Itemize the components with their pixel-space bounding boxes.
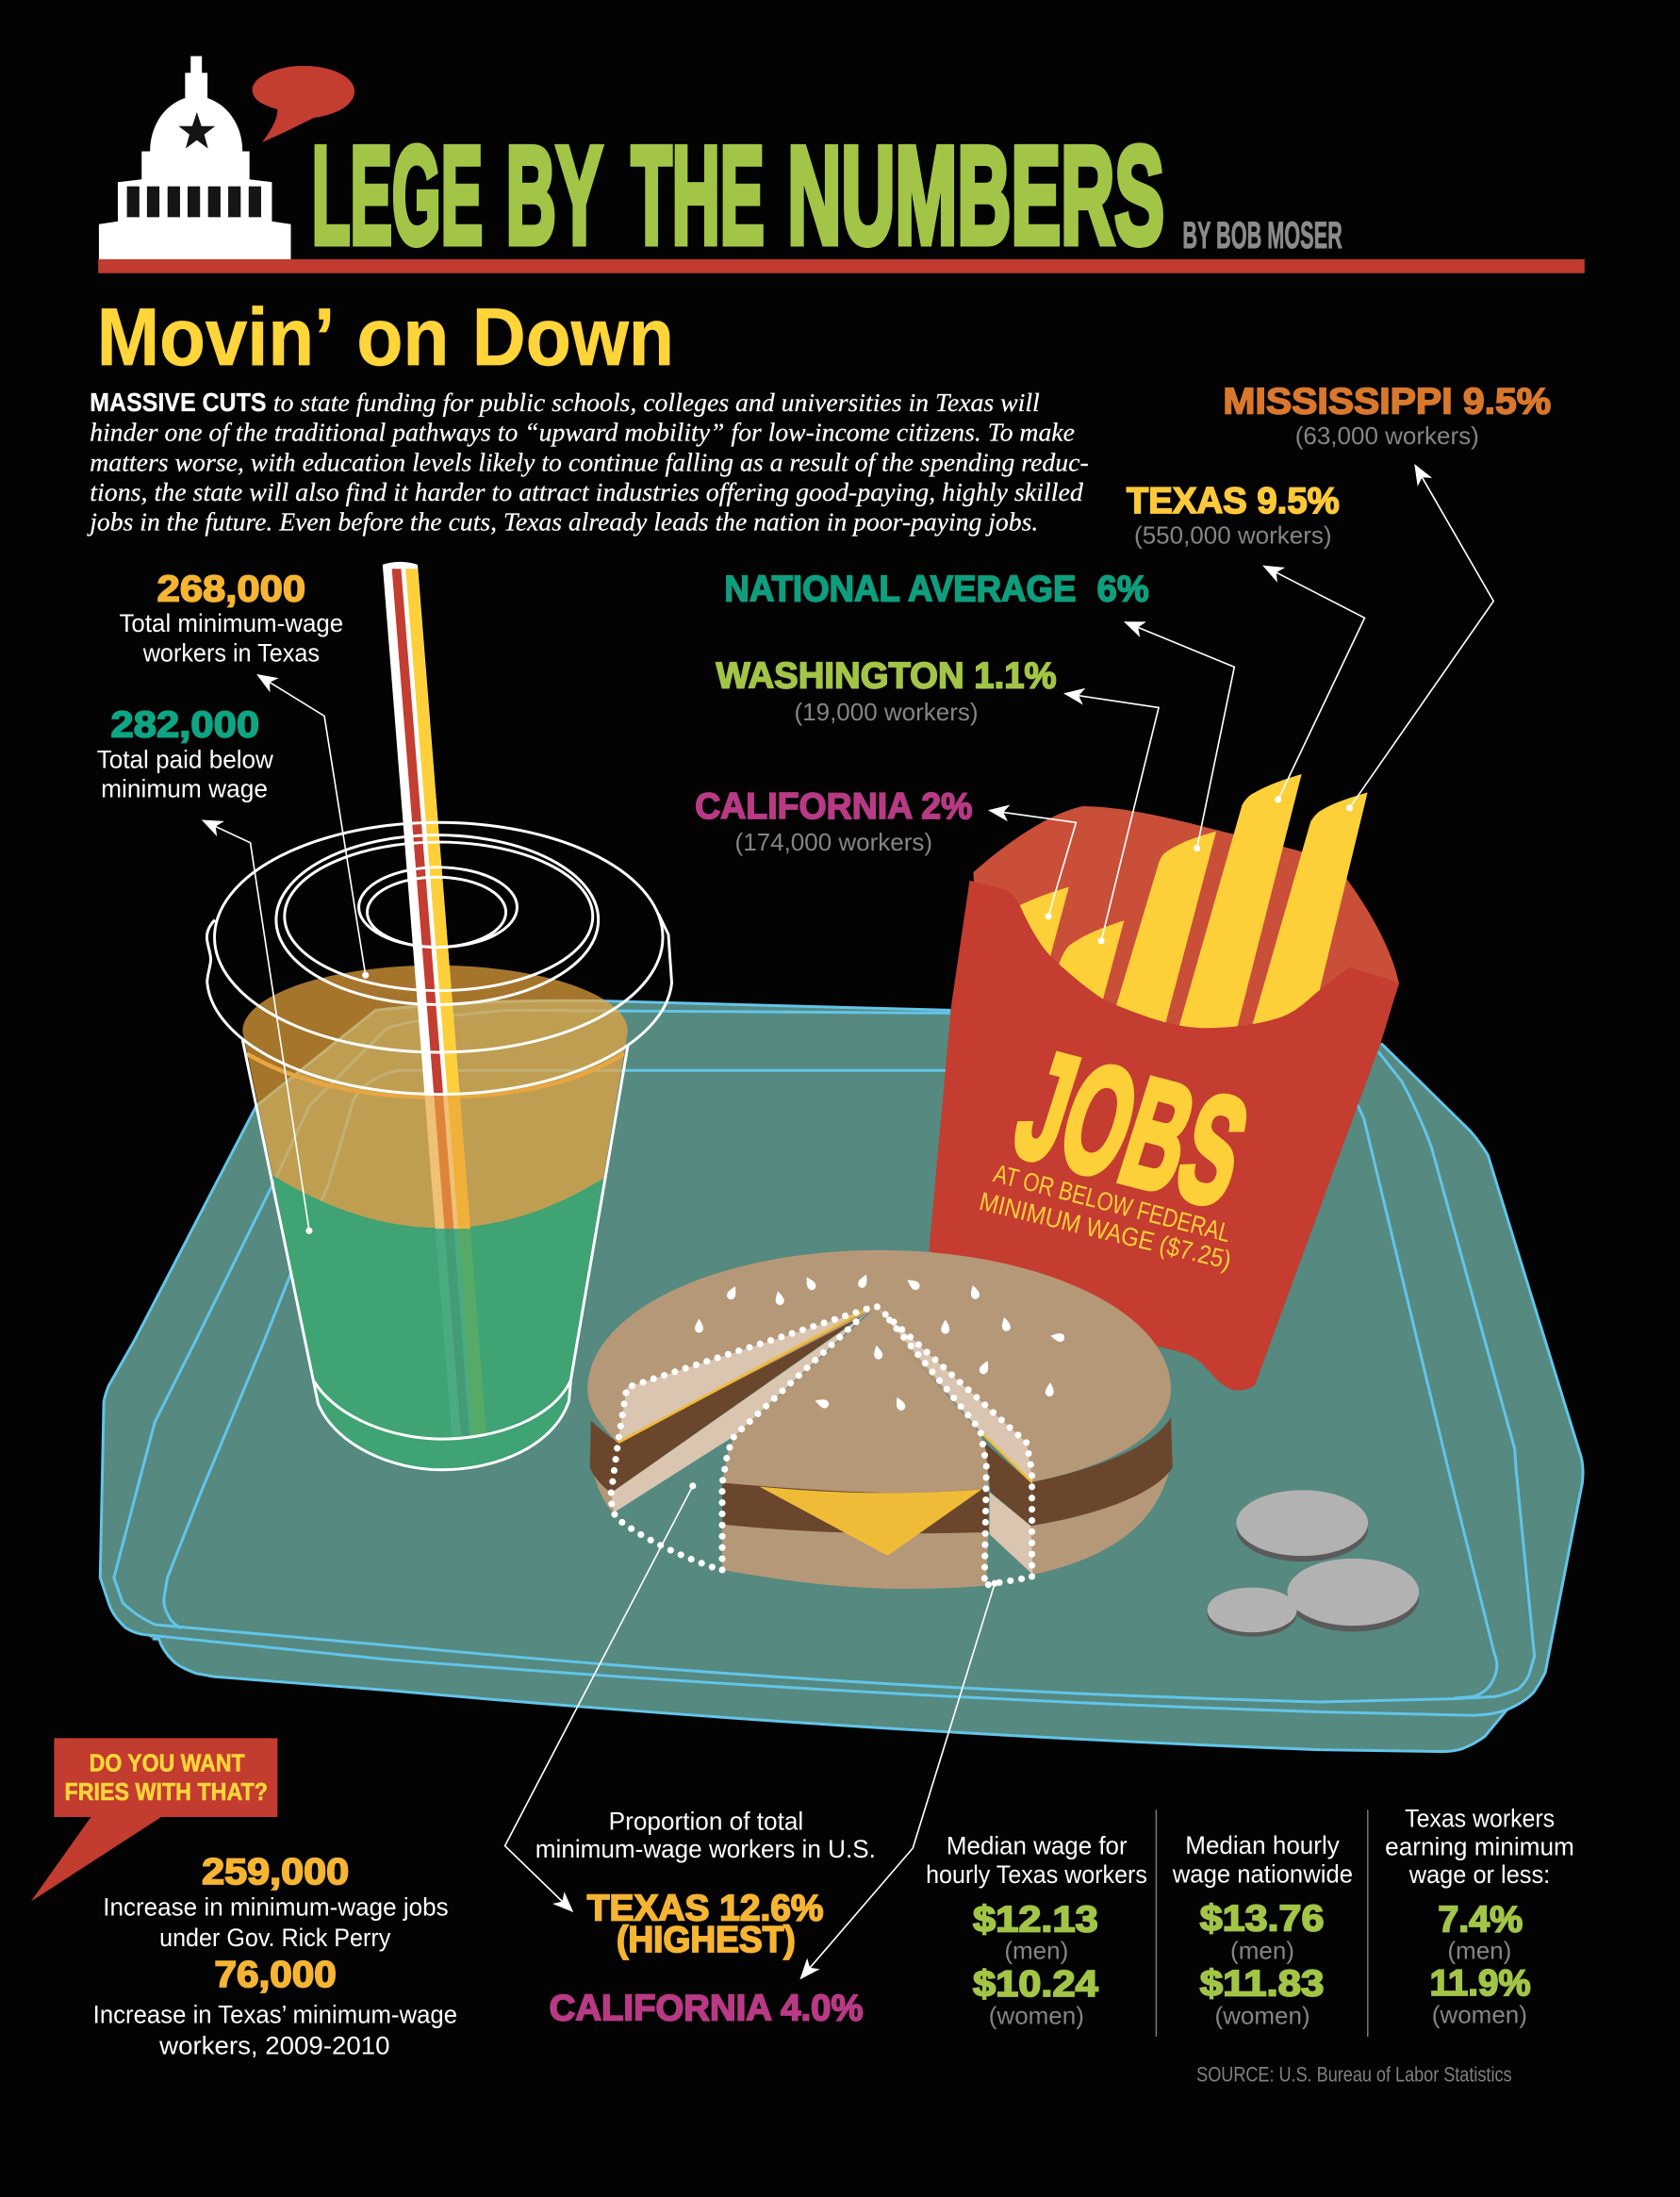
column: Texas median wage: hourly Texas workers <box>926 1860 1147 1889</box>
icon: speech bubble <box>253 66 354 142</box>
cup: green liquid (282,000 workers) <box>272 1176 603 1470</box>
hamburger <box>587 1250 1173 1589</box>
label: National average: NATIONAL AVERAGE <box>724 569 1076 609</box>
intro text: hinder one of the traditional pathways to “upward mobility” for low-income citizens. To make <box>90 418 1075 446</box>
heading: Down <box>472 292 674 383</box>
label: California: (174,000 workers) <box>735 828 932 856</box>
proportion of workers: minimum-wage workers in U.S. <box>535 1835 876 1863</box>
column: national median wage: (women) <box>1214 2001 1310 2029</box>
label: 268,000 <box>119 569 343 667</box>
straw <box>383 562 486 1436</box>
label: Mississippi <box>1223 381 1551 450</box>
label: 282,000: 282,000 <box>111 705 259 746</box>
header <box>98 56 1585 273</box>
cup: tan liquid (268,000 workers) <box>242 966 628 1228</box>
proportion of workers <box>535 1808 876 2028</box>
label: Texas <box>1127 481 1340 550</box>
column: Texas minimum wage share: 7.4% <box>1438 1899 1523 1940</box>
column: national median wage <box>1172 1831 1353 2029</box>
column: Texas median wage <box>926 1832 1147 2029</box>
divider <box>1367 1809 1369 2037</box>
label: Mississippi: MISSISSIPPI 9.5% <box>1223 381 1551 421</box>
fries box: front panel <box>929 881 1399 1391</box>
label: Mississippi: (63,000 workers) <box>1295 421 1479 450</box>
pointer: Mississippi <box>1349 465 1493 808</box>
column: Texas median wage: (women) <box>989 2001 1084 2029</box>
pointer: National average <box>1125 622 1234 849</box>
fries box: caption: AT OR BELOW FEDERAL <box>991 1158 1234 1247</box>
stat: 259,000: 259,000 <box>202 1852 349 1892</box>
column: Texas minimum wage share <box>1385 1804 1574 2029</box>
stat: 76,000: Increase in Texas’ minimum-wage <box>93 2001 457 2029</box>
label: Texas: TEXAS 9.5% <box>1127 481 1340 521</box>
title: LEGE <box>312 119 483 273</box>
stat: 259,000: under Gov. Rick Perry <box>159 1924 391 1952</box>
burger: cheese <box>759 1487 982 1556</box>
intro text: jobs in the future. Even before the cuts, Texas already leads the nation in poor-paying jobs. <box>87 507 1038 536</box>
divider <box>1156 1809 1157 2037</box>
label: 282,000: minimum wage <box>101 775 268 803</box>
burger: centre slice <box>722 1310 989 1493</box>
pointer: California 2% <box>990 810 1076 917</box>
cup: lid <box>206 822 672 1095</box>
fries: five bars <box>1020 774 1368 1044</box>
column: national median wage: (men) <box>1230 1936 1294 1964</box>
stat: 259,000: Increase in minimum-wage jobs <box>103 1892 449 1921</box>
column: Texas median wage: $12.13 <box>973 1899 1098 1940</box>
burger: patty <box>590 1313 1173 1533</box>
drink cup <box>206 562 672 1470</box>
intro text: tions, the state will also find it harder to attract industries offering good-paying, highly skilled <box>90 478 1083 506</box>
proportion of workers: TEXAS 12.6% <box>587 1889 823 1929</box>
fries box: back panel <box>973 806 1399 1043</box>
title <box>312 119 1164 273</box>
heading: Movin’ <box>97 292 335 383</box>
proportion of workers: Proportion of total <box>609 1808 803 1836</box>
stat: 76,000 <box>93 1955 457 2059</box>
column: national median wage: Median hourly <box>1185 1831 1340 1859</box>
tray <box>100 1000 1583 1752</box>
cup: outline <box>242 1040 628 1470</box>
callout: fries with that: DO YOU WANT <box>90 1748 245 1776</box>
source: SOURCE: U.S. Bureau of Labor Statistics <box>1196 2062 1512 2086</box>
label: Washington: (19,000 workers) <box>794 698 979 726</box>
proportion of workers: CALIFORNIA 4.0% <box>550 1988 864 2028</box>
heading: on <box>356 292 449 383</box>
column: Texas minimum wage share: (women) <box>1432 2001 1527 2029</box>
intro text <box>87 388 1089 536</box>
fries box: JOBS label: JOBS <box>999 1018 1265 1239</box>
burger: sesame seeds <box>695 1273 1065 1412</box>
stat: 259,000 <box>103 1852 449 1952</box>
fries box: caption: MINIMUM WAGE ($7.25) <box>977 1186 1234 1275</box>
label: 282,000 <box>97 705 274 803</box>
column: national median wage: wage nationwide <box>1172 1860 1353 1889</box>
column: Texas minimum wage share: (men) <box>1447 1936 1511 1964</box>
heading <box>97 292 674 383</box>
icon: capitol building <box>99 56 290 260</box>
stat: 76,000: workers, 2009-2010 <box>158 2031 390 2059</box>
pointer: Washington <box>1064 694 1159 941</box>
french fries box <box>929 774 1399 1391</box>
intro text: matters worse, with education levels likely to continue falling as a result of the spending reduc- <box>90 449 1089 477</box>
burger: cut-away wedges <box>611 1307 1032 1575</box>
pointer: California proportion <box>800 1583 995 1978</box>
column: national median wage: $11.83 <box>1200 1964 1324 2005</box>
label: California: CALIFORNIA 2% <box>695 786 972 827</box>
title: THE <box>632 119 765 273</box>
label: 268,000: Total minimum-wage <box>119 609 343 637</box>
callout: fries with that <box>31 1738 277 1901</box>
coins <box>1208 1490 1419 1637</box>
burger: bottom bun <box>593 1464 1171 1589</box>
label: Washington: WASHINGTON 1.1% <box>716 656 1057 697</box>
label: 268,000: workers in Texas <box>142 638 320 667</box>
burger: top bun <box>587 1250 1171 1482</box>
label: National average: 6% <box>1097 569 1149 609</box>
title: BY <box>506 119 602 273</box>
column: Texas minimum wage share: earning minimum <box>1385 1832 1574 1860</box>
column: Texas median wage: (men) <box>1004 1936 1068 1964</box>
proportion of workers: (HIGHEST) <box>617 1920 796 1960</box>
label: California <box>695 786 972 856</box>
pointer: Texas 9.5% <box>1264 566 1364 800</box>
column: Texas minimum wage share: 11.9% <box>1430 1963 1531 2004</box>
callout: fries with that: FRIES WITH THAT? <box>65 1777 268 1806</box>
byline: BY BOB MOSER <box>1182 214 1342 256</box>
label: 282,000: Total paid below <box>97 745 274 773</box>
label: Texas: (550,000 workers) <box>1134 521 1332 550</box>
pointer: 282,000 <box>203 820 309 1231</box>
pointer: Texas proportion <box>505 1486 693 1911</box>
intro text: MASSIVE CUTS <box>90 388 266 417</box>
column: Texas median wage: $10.24 <box>973 1964 1098 2005</box>
column: Texas minimum wage share: wage or less: <box>1408 1860 1550 1889</box>
burger: dotted outlines <box>611 1307 1032 1586</box>
pointer: 268,000 <box>257 675 366 975</box>
title: NUMBERS <box>787 119 1164 273</box>
column: Texas median wage: Median wage for <box>947 1832 1128 1860</box>
intro text: to state funding for public schools, colleges and universities in Texas will <box>273 388 1040 417</box>
label: Washington <box>716 656 1057 726</box>
header rule <box>98 259 1585 273</box>
label: 268,000: 268,000 <box>157 569 305 609</box>
column: national median wage: $13.76 <box>1200 1899 1324 1940</box>
column: Texas minimum wage share: Texas workers <box>1405 1804 1555 1832</box>
stat: 76,000: 76,000 <box>215 1955 337 1995</box>
